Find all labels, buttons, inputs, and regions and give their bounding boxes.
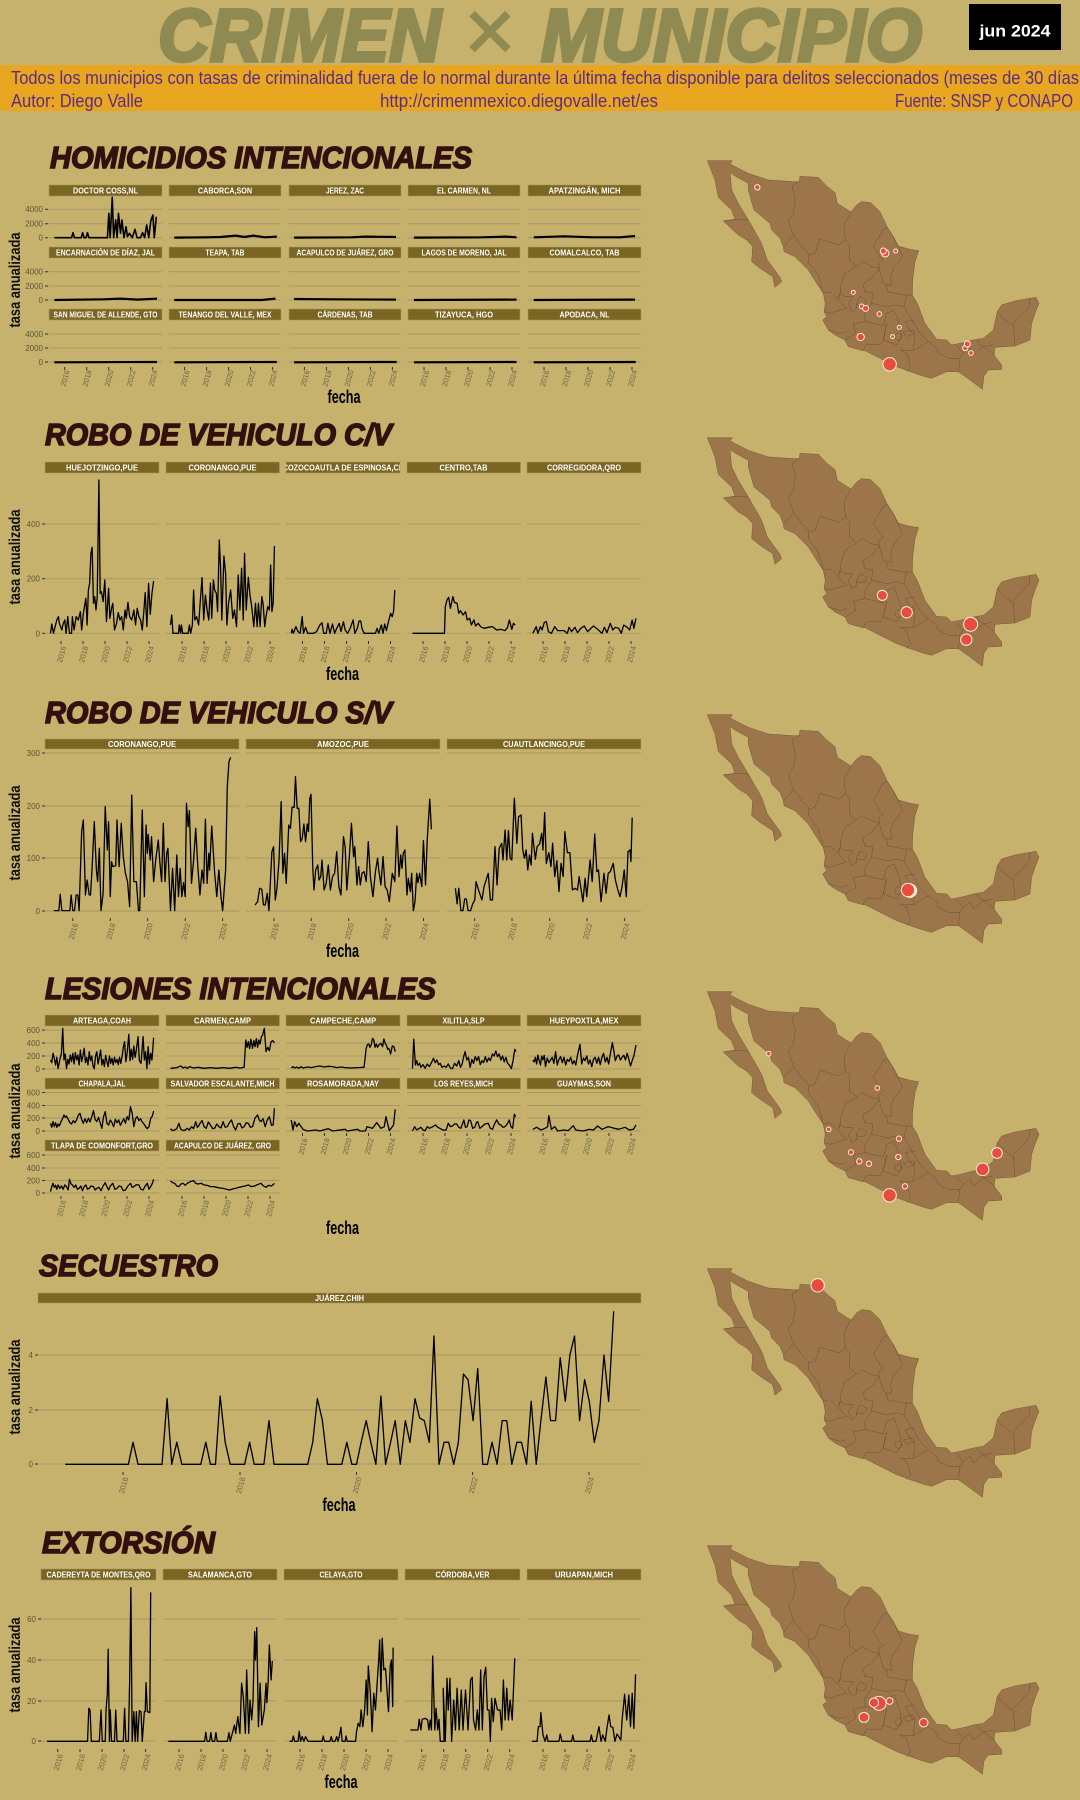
panel: Los Reyes: LOS REYES,MICH <box>434 1078 493 1088</box>
subtitle banner: http://crimenmexico.diegovalle.net/es <box>380 91 658 111</box>
y axis row 1: 400 <box>27 1039 41 1048</box>
panel: Jerez: JEREZ, ZAC <box>326 186 364 196</box>
y axis: 60 <box>27 1615 37 1624</box>
panel: Tizayuca: 2024 <box>506 369 519 388</box>
y axis: 300 <box>27 749 41 758</box>
y axis: 0 <box>29 1460 34 1469</box>
y axis: 4 <box>29 1351 34 1360</box>
panel: Carmen <box>166 1015 280 1069</box>
panel: Huejotzingo: 2018 <box>77 645 90 664</box>
panel: Jerez <box>289 185 401 238</box>
panel: Centro: 2024 <box>505 645 518 664</box>
panel: Cadereyta de Montes: 2020 <box>96 1753 109 1772</box>
panel: Cordoba: 2020 <box>460 1753 473 1772</box>
panel: Cordoba: 2018 <box>438 1753 451 1772</box>
panel: Apodaca: 2022 <box>604 369 617 388</box>
section: secuestro <box>7 1248 641 1515</box>
y axis row 3 <box>25 330 48 367</box>
panel: Comalcalco <box>528 247 641 300</box>
panel: Tlapa de Comonfort: 2020 <box>99 1199 112 1218</box>
panel: Juarez: JUÁREZ,CHIH <box>315 1293 364 1303</box>
y axis row 1: 4000 <box>25 205 44 214</box>
panel: Los Reyes: 2020 <box>461 1137 474 1156</box>
panel: Encarnacion de Diaz <box>49 246 162 300</box>
panel: Apatzingan <box>528 185 641 238</box>
panel: San Miguel de Allende: SAN MIGUEL DE ALLENDE, GTO <box>54 310 158 320</box>
panel: Rosamorada: ROSAMORADA,NAY <box>307 1078 379 1088</box>
panel: Tlapa de Comonfort <box>45 1140 159 1218</box>
heading: EXTORSIÓN <box>42 1525 216 1560</box>
map: secuestro <box>707 1269 1039 1497</box>
panel: Centro: 2020 <box>461 645 474 664</box>
panel: Tizayuca: 2016 <box>418 369 431 388</box>
panel: Centro: CENTRO,TAB <box>440 462 488 472</box>
panel: Huejotzingo: 2022 <box>121 645 134 664</box>
x axis title: fecha <box>326 664 360 684</box>
panel: Cuautlancingo: 2022 <box>581 922 594 941</box>
panel: Tlapa de Comonfort: 2018 <box>77 1199 90 1218</box>
x axis title: fecha <box>322 1495 356 1515</box>
panel: Xilitla: XILITLA,SLP <box>442 1016 485 1026</box>
section: extorsion <box>7 1525 641 1792</box>
panel: Arteaga: ARTEAGA,COAH <box>73 1016 131 1026</box>
panel: Acapulco de Juarez: 2022 <box>242 1199 255 1218</box>
panel: Cordoba: 2016 <box>416 1753 429 1772</box>
panel: Coronango: 2018 <box>104 922 117 941</box>
y axis row 3: 4000 <box>25 330 44 339</box>
panel: Centro: 2016 <box>417 645 430 664</box>
heading: HOMICIDIOS INTENCIONALES <box>50 140 472 175</box>
panel: Apodaca: 2018 <box>560 369 573 388</box>
panel: Amozoc: AMOZOC,PUE <box>317 739 369 749</box>
panel: Centro: 2022 <box>483 645 496 664</box>
panel: Acapulco de Juarez: ACAPULCO DE JUÁREZ, GRO <box>174 1140 271 1150</box>
panel: Lagos de Moreno: LAGOS DE MORENO, JAL <box>422 248 506 258</box>
panel: Uruapan: 2020 <box>581 1753 594 1772</box>
y axis row 1 <box>25 205 48 242</box>
panel: Cordoba: CÓRDOBA,VER <box>436 1568 490 1580</box>
map: lesiones intencionales <box>707 992 1039 1220</box>
y axis row 2: 2000 <box>25 282 44 291</box>
panel: San Miguel de Allende: 2018 <box>81 369 94 388</box>
y axis: 0 <box>32 1737 37 1746</box>
panel: Corregidora: 2024 <box>625 645 638 664</box>
subtitle banner <box>0 65 1080 111</box>
heading: ROBO DE VEHICULO S/V <box>45 695 394 730</box>
section: robo de vehiculo c/v <box>7 417 641 684</box>
panel: San Miguel de Allende: 2022 <box>125 369 138 388</box>
panel: Caborca: CABORCA,SON <box>198 186 252 196</box>
panel: Tenango del Valle: 2018 <box>201 369 214 388</box>
panel: Lagos de Moreno <box>408 247 520 300</box>
y axis row 2: 4000 <box>25 268 44 276</box>
section: homicidios intencionales <box>7 140 641 407</box>
panel: Salamanca: 2024 <box>261 1753 274 1772</box>
y axis row 2: 200 <box>27 1114 41 1123</box>
y axis row 3: 400 <box>27 1164 41 1173</box>
panel: Salamanca: 2016 <box>173 1753 186 1772</box>
panel: Guaymas: GUAYMAS,SON <box>557 1078 611 1088</box>
panel: Ocozocoautla de Espinosa: OCOZOCOAUTLA DE ESPINOSA,CHP <box>277 462 409 472</box>
panel: Rosamorada <box>286 1078 400 1156</box>
panel: El Carmen: EL CARMEN, NL <box>437 186 491 196</box>
panel: Acapulco de Juarez: 2024 <box>264 1199 277 1218</box>
section: robo de vehiculo s/v <box>7 695 641 961</box>
panel: Salamanca: SALAMANCA,GTO <box>188 1570 252 1580</box>
panel: Guaymas: 2024 <box>625 1137 638 1156</box>
panel: Huejotzingo: HUEJOTZINGO,PUE <box>66 462 138 472</box>
y axis row 3: 0 <box>39 358 44 367</box>
y axis row 2: 600 <box>27 1088 41 1098</box>
panel: Encarnacion de Diaz: ENCARNACIÓN DE DÍAZ, JAL <box>56 246 155 258</box>
panel: Coronango <box>166 462 280 664</box>
panel: Xilitla <box>407 1015 520 1069</box>
y axis: 2 <box>29 1406 34 1415</box>
panel: Teapa <box>169 247 281 300</box>
panel: Cadereyta de Montes: 2024 <box>140 1753 153 1772</box>
panel: Juarez <box>38 1293 641 1495</box>
map: homicidios <box>707 161 1039 389</box>
y axis row 2: 0 <box>36 1127 41 1136</box>
panel: Juarez: 2016 <box>117 1476 130 1495</box>
panel: Teapa: TEAPA, TAB <box>206 248 244 258</box>
panel: Huejotzingo: 2020 <box>99 645 112 664</box>
y axis row 3: 0 <box>36 1189 41 1198</box>
panel: Los Reyes: 2024 <box>505 1137 518 1156</box>
map: robo de vehiculo c/v <box>707 438 1039 666</box>
panel: San Miguel de Allende: 2016 <box>59 369 72 388</box>
panel: Celaya: 2016 <box>294 1753 307 1772</box>
y axis: 100 <box>27 854 41 863</box>
y axis row 1: 2000 <box>25 220 44 228</box>
y axis: 200 <box>27 802 41 811</box>
panel: Hueypoxtla <box>527 1015 641 1069</box>
panel: Caborca <box>169 185 281 238</box>
panel: Guaymas: 2018 <box>559 1137 572 1156</box>
panel: Juarez: 2018 <box>234 1476 247 1495</box>
y axis <box>27 749 45 916</box>
panel: Tizayuca: TIZAYUCA, HGO <box>435 310 493 320</box>
panel: Carmen: CARMEN,CAMP <box>194 1016 251 1026</box>
panel: Cardenas: CÁRDENAS, TAB <box>318 310 372 320</box>
panel: Cordoba: 2022 <box>482 1753 495 1772</box>
panel: Corregidora <box>527 462 641 664</box>
panel: Ocozocoautla de Espinosa: 2024 <box>385 645 398 664</box>
panel: El Carmen <box>408 185 520 238</box>
panel: Salamanca: 2020 <box>217 1753 230 1772</box>
panel: Juarez: 2024 <box>583 1476 596 1495</box>
panel: Corregidora: 2018 <box>559 645 572 664</box>
panel: Acapulco de Juarez: 2020 <box>220 1199 233 1218</box>
panel: Cuautlancingo: CUAUTLANCINGO,PUE <box>503 739 585 749</box>
panel: San Miguel de Allende: 2024 <box>147 369 160 388</box>
panel: Corregidora: 2022 <box>603 645 616 664</box>
panel: Los Reyes: 2016 <box>417 1137 430 1156</box>
y axis row 3 <box>27 1151 45 1198</box>
y axis row 2: 0 <box>39 296 44 305</box>
panel: Los Reyes: 2018 <box>439 1137 452 1156</box>
panel: Celaya: 2018 <box>316 1753 329 1772</box>
x axis title: fecha <box>326 941 360 961</box>
panel: Cadereyta de Montes: 2022 <box>118 1753 131 1772</box>
panel: Amozoc: 2024 <box>418 922 431 941</box>
y axis row 3: 600 <box>27 1151 41 1160</box>
heading: SECUESTRO <box>39 1248 218 1283</box>
panel: Salvador Escalante <box>166 1078 280 1131</box>
panel: Acapulco de Juarez <box>166 1140 280 1218</box>
map: robo de vehiculo s/v <box>707 715 1039 943</box>
panel: Uruapan: 2018 <box>559 1753 572 1772</box>
panel: Tenango del Valle: 2022 <box>245 369 258 388</box>
panel: Tenango del Valle: 2024 <box>267 369 280 388</box>
x axis title: fecha <box>326 1218 360 1238</box>
panel: Guaymas: 2016 <box>537 1137 550 1156</box>
date badge: jun 2024 <box>978 22 1051 40</box>
panel: Apodaca: 2024 <box>626 369 639 388</box>
panel: Coronango: CORONANGO,PUE <box>108 739 176 749</box>
panel: Guaymas: 2020 <box>581 1137 594 1156</box>
panel: Tlapa de Comonfort: 2022 <box>121 1199 134 1218</box>
panel: Juarez: 2022 <box>467 1476 480 1495</box>
panel: Coronango: 2016 <box>176 645 189 664</box>
y axis row 1 <box>27 1026 45 1074</box>
panel: Doctor Coss: DOCTOR COSS,NL <box>73 186 138 196</box>
panel: Celaya: 2020 <box>338 1753 351 1772</box>
panel: Los Reyes: 2022 <box>483 1137 496 1156</box>
y axis: 400 <box>27 520 41 529</box>
panel: Uruapan: URUAPAN,MICH <box>555 1570 613 1580</box>
panel: Apatzingan: APATZINGÁN, MICH <box>548 186 620 196</box>
panel: Acapulco de Juarez: 2016 <box>176 1199 189 1218</box>
panel: Tizayuca: 2018 <box>440 369 453 388</box>
panel: Corregidora: 2016 <box>537 645 550 664</box>
panel: Celaya: 2022 <box>360 1753 373 1772</box>
panel: Tlapa de Comonfort: 2024 <box>143 1199 156 1218</box>
y axis <box>29 1351 38 1469</box>
y axis: 0 <box>36 629 41 638</box>
panel: Cuautlancingo: 2020 <box>544 922 557 941</box>
y axis title: tasa anualizada <box>7 1063 24 1158</box>
panel: Ocozocoautla de Espinosa: 2016 <box>297 645 310 664</box>
y axis <box>27 520 45 638</box>
panel: Ocozocoautla de Espinosa: 2018 <box>319 645 332 664</box>
panel: Tlapa de Comonfort: TLAPA DE COMONFORT,GRO <box>51 1140 153 1150</box>
map: extorsion <box>707 1546 1039 1774</box>
panel: Cuautlancingo: 2024 <box>619 922 632 941</box>
panel: Amozoc <box>246 739 440 941</box>
panel: Campeche: CAMPECHE,CAMP <box>310 1016 376 1026</box>
panel: Tizayuca: 2020 <box>462 369 475 388</box>
y axis row 2: 400 <box>27 1102 41 1110</box>
panel: Salamanca: 2022 <box>239 1753 252 1772</box>
panel: Cardenas: 2020 <box>343 369 356 388</box>
heading: ROBO DE VEHICULO C/V <box>45 417 394 452</box>
x axis title: fecha <box>328 387 361 407</box>
panel: Chapala: CHAPALA,JAL <box>78 1078 126 1088</box>
panel: Cuautlancingo: 2018 <box>506 922 519 941</box>
panel: Salamanca <box>163 1569 277 1772</box>
panel: Cadereyta de Montes <box>41 1569 156 1772</box>
panel: Cardenas: 2022 <box>365 369 378 388</box>
panel: Huejotzingo: 2024 <box>143 645 156 664</box>
x axis title: fecha <box>324 1772 358 1792</box>
panel: Salvador Escalante: SALVADOR ESCALANTE,MICH <box>170 1078 274 1088</box>
panel: Guaymas: 2022 <box>603 1137 616 1156</box>
y axis row 1: 0 <box>39 234 44 242</box>
panel: Cadereyta de Montes: CADEREYTA DE MONTES,QRO <box>46 1570 151 1580</box>
panel: Cuautlancingo <box>447 739 641 941</box>
panel: Coronango <box>45 739 239 941</box>
panel: Amozoc: 2016 <box>268 922 281 941</box>
panel: Coronango: 2020 <box>142 922 155 941</box>
y axis title: tasa anualizada <box>7 1617 24 1712</box>
panel: Comalcalco: COMALCALCO, TAB <box>550 248 620 258</box>
title <box>158 0 922 80</box>
panel: Uruapan <box>527 1569 641 1772</box>
y axis title: tasa anualizada <box>7 509 24 604</box>
panel: Tizayuca: 2022 <box>484 369 497 388</box>
panel: Doctor Coss <box>49 185 162 238</box>
y axis <box>27 1615 41 1746</box>
panel: Cardenas: 2018 <box>321 369 334 388</box>
panel: Celaya: 2024 <box>382 1753 395 1772</box>
y axis: 20 <box>27 1697 37 1706</box>
panel: Los Reyes <box>407 1078 520 1156</box>
panel: Celaya <box>284 1569 398 1772</box>
panel: Chapala <box>45 1078 159 1131</box>
panel: Tenango del Valle: 2020 <box>223 369 236 388</box>
y axis row 3: 2000 <box>25 344 44 353</box>
panel: Arteaga <box>45 1015 159 1069</box>
y axis: 200 <box>27 575 41 584</box>
panel: Huejotzingo: 2016 <box>55 645 68 664</box>
panel: Centro: 2018 <box>439 645 452 664</box>
y axis row 3: 200 <box>27 1176 41 1186</box>
panel: Ocozocoautla de Espinosa: 2022 <box>363 645 376 664</box>
panel: Hueypoxtla: HUEYPOXTLA,MEX <box>550 1016 619 1026</box>
panel: Corregidora: 2020 <box>581 645 594 664</box>
panel: Acapulco: ACAPULCO DE JUÁREZ, GRO <box>296 248 394 258</box>
panel: Uruapan: 2016 <box>537 1753 550 1772</box>
panel: Uruapan: 2024 <box>625 1753 638 1772</box>
panel: Amozoc: 2020 <box>343 922 356 941</box>
panel: Cardenas: 2016 <box>299 369 312 388</box>
panel: Cardenas: 2024 <box>387 369 400 388</box>
y axis: 0 <box>36 907 41 916</box>
panel: Tlapa de Comonfort: 2016 <box>55 1199 68 1218</box>
panel: Juarez: 2020 <box>351 1476 364 1495</box>
panel: Coronango: CORONANGO,PUE <box>188 462 257 472</box>
panel: Rosamorada: 2016 <box>297 1137 310 1156</box>
panel: Rosamorada: 2020 <box>341 1137 354 1156</box>
panel: Coronango: 2022 <box>179 922 192 941</box>
panel: Cordoba <box>405 1568 520 1772</box>
panel: Cordoba: 2024 <box>504 1753 517 1772</box>
panel: Apodaca: 2016 <box>538 369 551 388</box>
panel: Apodaca: APODACA, NL <box>560 310 610 320</box>
panel: Guaymas <box>527 1078 641 1156</box>
panel: Salamanca: 2018 <box>195 1753 208 1772</box>
panel: Centro <box>407 462 520 664</box>
panel: Corregidora: CORREGIDORA,QRO <box>547 462 621 472</box>
panel: Cadereyta de Montes: 2018 <box>74 1753 87 1772</box>
panel: Ocozocoautla de Espinosa <box>286 462 400 663</box>
panel: Coronango: 2024 <box>217 922 230 941</box>
panel: San Miguel de Allende: 2020 <box>103 369 116 388</box>
panel: Coronango: 2024 <box>264 645 277 664</box>
date badge <box>969 4 1061 50</box>
panel: Rosamorada: 2018 <box>319 1137 332 1156</box>
panel: Campeche <box>286 1015 400 1069</box>
y axis title: tasa anualizada <box>7 1339 24 1434</box>
panel: Celaya: CELAYA,GTO <box>320 1570 363 1580</box>
panel: San Miguel de Allende <box>49 309 162 388</box>
y axis title: tasa anualizada <box>7 232 24 328</box>
section: lesiones intencionales <box>7 971 641 1238</box>
panel: Apodaca <box>528 309 641 388</box>
y axis row 2 <box>27 1088 45 1136</box>
panel: Coronango: 2018 <box>198 645 211 664</box>
panel: Uruapan: 2022 <box>603 1753 616 1772</box>
panel: Tenango del Valle <box>169 309 281 388</box>
panel: Acapulco <box>289 247 401 300</box>
y axis: 40 <box>27 1656 37 1665</box>
panel: Coronango: 2022 <box>242 645 255 664</box>
panel: Tenango del Valle: 2016 <box>179 369 192 388</box>
panel: Amozoc: 2022 <box>380 922 393 941</box>
panel: Rosamorada: 2024 <box>385 1137 398 1156</box>
panel: Tizayuca <box>408 309 520 388</box>
panel: Rosamorada: 2022 <box>363 1137 376 1156</box>
panel: Tenango del Valle: TENANGO DEL VALLE, MEX <box>178 310 272 320</box>
heading: LESIONES INTENCIONALES <box>45 971 436 1006</box>
panel: Cuautlancingo: 2016 <box>469 922 482 941</box>
panel: Coronango: 2020 <box>220 645 233 664</box>
panel: Acapulco de Juarez: 2018 <box>198 1199 211 1218</box>
y axis row 1: 200 <box>27 1052 41 1061</box>
panel: Huejotzingo <box>45 462 159 664</box>
y axis title: tasa anualizada <box>7 785 24 880</box>
panel: Ocozocoautla de Espinosa: 2020 <box>341 645 354 664</box>
y axis row 1: 600 <box>27 1026 41 1035</box>
y axis row 1: 0 <box>36 1065 41 1074</box>
panel: Cardenas <box>289 309 401 388</box>
panel: Apodaca: 2020 <box>582 369 595 388</box>
panel: Coronango: 2016 <box>67 922 80 941</box>
y axis row 2 <box>25 268 48 305</box>
subtitle banner: Autor: Diego Valle <box>11 91 143 111</box>
panel: Cadereyta de Montes: 2016 <box>52 1753 65 1772</box>
panel: Amozoc: 2018 <box>305 922 318 941</box>
